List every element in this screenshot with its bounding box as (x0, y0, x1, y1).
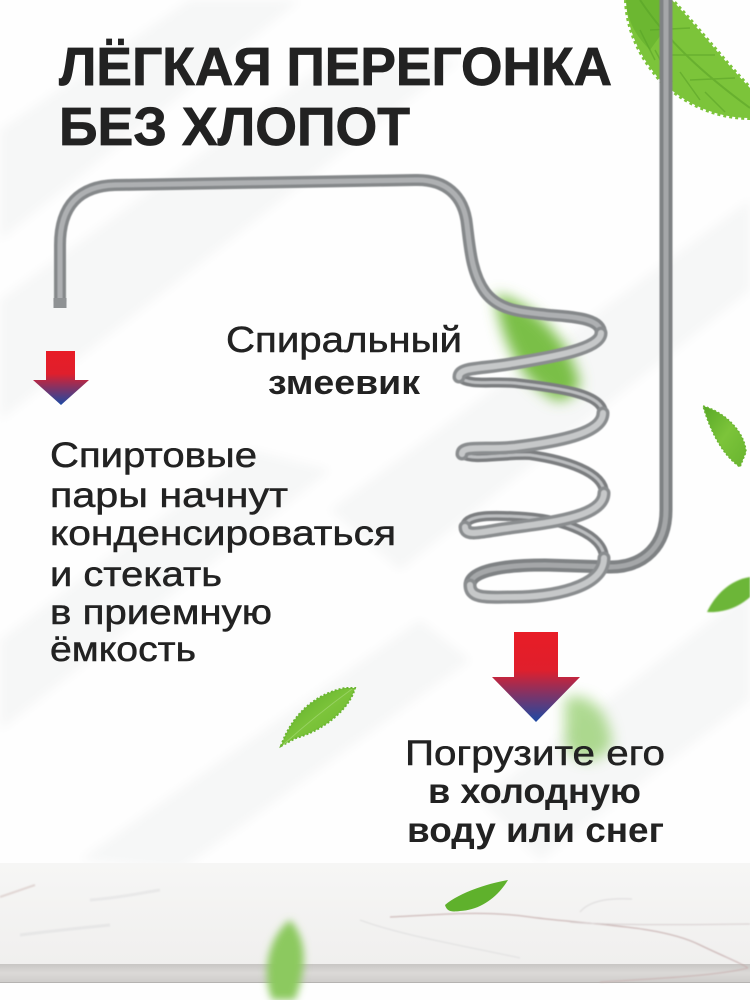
text block: immerse: воду или снег (407, 811, 664, 850)
tube open end (54, 298, 66, 308)
text block: vapours: пары начнут (50, 476, 288, 515)
text block: vapours: Спиртовые (50, 436, 257, 475)
label: spiral coil: Спиральный (226, 319, 462, 360)
leaf: top right (626, 0, 750, 118)
title (59, 37, 612, 157)
text block: vapours: в приемную (50, 593, 272, 632)
leaf: blurred near lower arrow (565, 696, 612, 760)
label: spiral coil (226, 319, 462, 402)
text block: immerse: Погрузите его (405, 734, 665, 773)
text block: immerse: в холодную (428, 772, 641, 811)
text block: vapours: конденсироваться (50, 514, 396, 553)
label: spiral coil: змеевик (268, 364, 421, 402)
leaf: right (703, 406, 746, 467)
leaf: blurred on table edge (267, 920, 304, 1000)
leaf: on table (445, 880, 508, 911)
text block: vapours: и стекать (50, 555, 222, 594)
arrow: large right (492, 632, 580, 722)
title: ЛЁГКАЯ ПЕРЕГОНКА (59, 37, 612, 97)
text block: vapours (50, 436, 396, 669)
marble table top (0, 863, 750, 983)
spiral coil tube (60, 0, 666, 597)
text block: immerse (405, 734, 665, 850)
arrow: small left (33, 351, 89, 405)
leaf: right lower (707, 577, 750, 612)
leaf: centre (281, 688, 355, 746)
leaf: blurred behind coil (495, 294, 580, 400)
title: БЕЗ ХЛОПОТ (59, 97, 410, 157)
text block: vapours: ёмкость (50, 630, 196, 669)
tube: front strands (459, 333, 604, 597)
tube: back strands (60, 0, 666, 585)
